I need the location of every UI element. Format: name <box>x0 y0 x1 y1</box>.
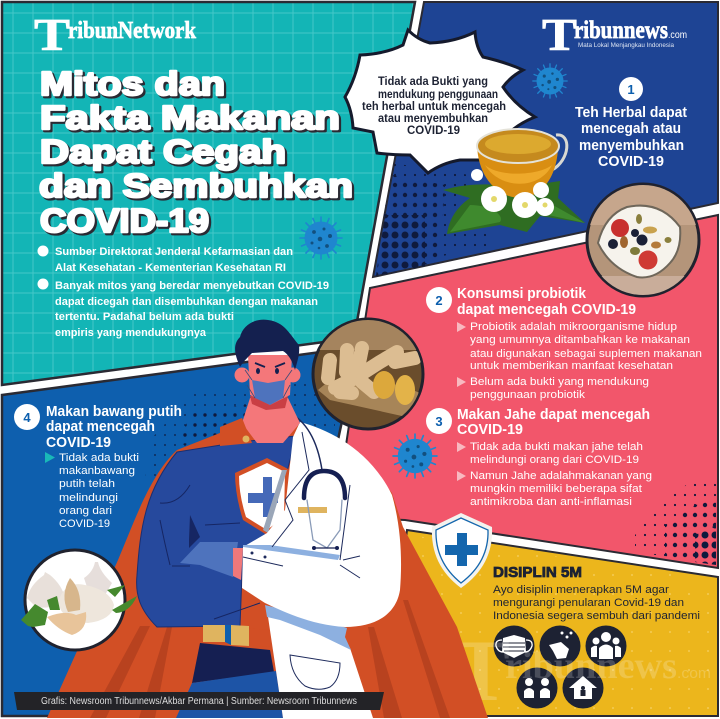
illustration: herbal tea cup and jasmine <box>443 129 585 234</box>
coat lines <box>243 432 360 578</box>
panel: teal title background <box>2 2 415 385</box>
text block: probiotik: untuk memberikan manfaat kesehatan <box>470 360 673 372</box>
badge: number 4: 4 <box>23 410 31 425</box>
logo: Tribunnews.com: T <box>542 9 577 60</box>
callout: starburst bubble: COVID-19 <box>407 124 461 137</box>
text block: jahe: antimikroba dan anti-inflamasi <box>470 496 632 508</box>
heading: bawang putih <box>46 404 182 451</box>
hair and face <box>234 320 300 405</box>
panel: navy herbal tea background <box>373 2 718 277</box>
heading: teh herbal: Teh Herbal dapat <box>575 105 687 121</box>
icon: virus navy panel <box>533 64 567 98</box>
heading: teh herbal: mencegah atau <box>581 121 681 137</box>
text block: source and intro <box>38 246 329 339</box>
heading: bawang putih: COVID-19 <box>46 435 111 451</box>
badge: number 1: 1 <box>627 82 635 97</box>
text block: bawang putih: orang dari <box>59 505 112 517</box>
title: Dapat Cegah <box>42 135 288 172</box>
watermark: tribunnews: ribunnews <box>505 645 677 687</box>
title: COVID-19 <box>40 202 209 239</box>
badge: number 1 <box>619 77 643 101</box>
heading: makan jahe: Makan Jahe dapat mencegah <box>457 407 650 423</box>
logo: TribunNetwork <box>34 9 197 60</box>
stethoscope <box>288 412 345 550</box>
text block: probiotik: Probiotik adalah mikroorganisme hidup <box>470 321 677 333</box>
photo: yogurt bowl <box>585 184 705 298</box>
title: dan Sembuhkan <box>39 167 353 204</box>
title: Fakta Makanan <box>40 99 340 136</box>
callout: starburst bubble: atau menyembuhkan <box>378 112 488 125</box>
panel: pink probiotic and ginger background <box>335 215 718 568</box>
text block: jahe: mungkin memiliki beberapa sifat <box>470 483 643 495</box>
title: Mitos dan <box>40 65 225 102</box>
title: Fakta Makanan <box>42 101 342 138</box>
title <box>39 65 355 241</box>
panel: blue garlic background <box>2 347 358 716</box>
photo: garlic <box>21 550 137 650</box>
panel: yellow disiplin background <box>385 530 718 716</box>
collar <box>220 418 252 446</box>
text block: disiplin 5M: Indonesia segera sembuh dari pandemi <box>493 610 700 622</box>
logo: Tribunnews.com: .com <box>668 30 687 41</box>
heading: makan jahe <box>457 407 650 438</box>
text block: jahe <box>457 441 652 508</box>
icon: virus teal panel <box>300 217 342 259</box>
text block: disiplin 5M: Ayo disiplin menerapkan 5M agar <box>493 584 669 596</box>
text block: bawang putih: melindungi <box>59 492 118 504</box>
callout: starburst bubble: mendukung penggunaan <box>378 88 498 101</box>
title: dan Sembuhkan <box>41 169 355 206</box>
halftone dots: blue panel <box>145 375 335 480</box>
text block: source and intro: Sumber Direktorat Jenderal Kefarmasian dan <box>55 246 293 258</box>
text block: disiplin 5M: DISIPLIN 5M <box>493 564 582 581</box>
text block: source and intro: dapat dicegah dan disembuhkan dengan makanan <box>55 296 318 308</box>
badge: number 3 <box>426 408 452 434</box>
pocket <box>290 655 340 689</box>
badge: number 4 <box>14 404 40 430</box>
badge: number 2: 2 <box>435 293 443 308</box>
lower coat <box>267 610 373 718</box>
watermark: tribunnews <box>452 623 711 719</box>
chest shield <box>235 458 288 535</box>
belt <box>203 625 270 647</box>
footer credit bar: Grafis: Newsroom Tribunnews/Akbar Permana | Sumber: Newsroom Tribunnews <box>41 696 357 707</box>
icons: 5M row <box>494 626 626 708</box>
heading: konsumsi probiotik: dapat mencegah COVID-19 <box>457 302 636 318</box>
text block: source and intro: tertentu. Padahal belum ada bukti <box>55 311 234 323</box>
text block: probiotik: yang umumnya ditambahkan ke makanan <box>470 334 690 346</box>
text block: source and intro: empiris yang mendukungnya <box>55 327 206 339</box>
title: Mitos dan <box>42 67 227 104</box>
text block: probiotik <box>457 321 702 401</box>
text block: bawang putih: COVID-19 <box>59 518 110 530</box>
heading: teh herbal: COVID-19 <box>598 154 664 170</box>
heading: makan jahe: COVID-19 <box>457 422 523 438</box>
trousers <box>192 643 274 683</box>
watermark: tribunnews: .com <box>677 665 711 682</box>
callout: starburst bubble: Tidak ada Bukti yang <box>378 75 488 88</box>
text block: probiotik: atau digunakan sebagai suplemen makanan <box>470 348 702 360</box>
name tag <box>298 507 327 513</box>
logo: TribunNetwork: ribunNetwork <box>68 18 197 44</box>
photo: ginger <box>313 319 425 429</box>
shield icon yellow panel <box>432 513 492 588</box>
callout: starburst bubble <box>345 30 535 173</box>
logo: Tribunnews.com: Mata Lokal Menjangkau Indonesia <box>578 43 675 49</box>
footer credit bar <box>14 692 384 710</box>
icon: virus pink panel <box>393 434 437 478</box>
text block: jahe: Namun Jahe adalahmakanan yang <box>470 470 652 482</box>
illustration: superhero doctor <box>47 320 488 718</box>
text block: disiplin 5M: mengurangi penularan Covid-19 dan <box>493 597 684 609</box>
heading: bawang putih: dapat mencegah <box>46 419 155 435</box>
text block: source and intro: Alat Kesehatan - Kementerian Kesehatan RI <box>55 262 286 274</box>
torso and arm <box>137 436 296 627</box>
watermark: tribunnews: T <box>452 623 510 719</box>
upper coat <box>242 422 401 627</box>
halftone dots: pink panel <box>635 478 716 565</box>
logo: TribunNetwork: T <box>34 9 70 60</box>
text block: source and intro: Banyak mitos yang beredar menyebutkan COVID-19 <box>55 280 329 292</box>
text block: disiplin 5M <box>493 564 700 622</box>
text block: bawang putih: Tidak ada bukti <box>59 452 139 464</box>
halftone dots: navy panel <box>376 163 492 276</box>
text block: jahe: melindungi orang dari COVID-19 <box>470 454 639 466</box>
cape <box>47 425 488 718</box>
logo: Tribunnews.com: ribunnews <box>574 17 668 44</box>
text block: probiotik: penggunaan probiotik <box>470 389 585 401</box>
glove <box>180 542 238 577</box>
text block: jahe: Tidak ada bukti makan jahe telah <box>470 441 643 453</box>
heading: teh herbal: menyembuhkan <box>579 138 684 154</box>
text block: bawang putih: putih telah <box>59 478 115 490</box>
heading: konsumsi probiotik <box>457 286 636 318</box>
heading: konsumsi probiotik: Konsumsi probiotik <box>457 286 587 302</box>
logo: Tribunnews.com <box>542 9 687 60</box>
text block: bawang putih: makanbawang <box>59 465 135 477</box>
callout: starburst bubble: teh herbal untuk mencegah <box>362 100 506 113</box>
title: COVID-19 <box>42 204 211 241</box>
text block: bawang putih <box>45 452 139 530</box>
title: Dapat Cegah <box>40 133 286 170</box>
heading: bawang putih: Makan bawang putih <box>46 404 182 420</box>
neck <box>242 398 300 443</box>
coat shadow band <box>265 605 351 650</box>
text block: probiotik: Belum ada bukti yang mendukung <box>470 376 649 388</box>
badge: number 2 <box>426 287 452 313</box>
badge: number 3: 3 <box>435 414 443 429</box>
heading: teh herbal <box>575 105 687 170</box>
